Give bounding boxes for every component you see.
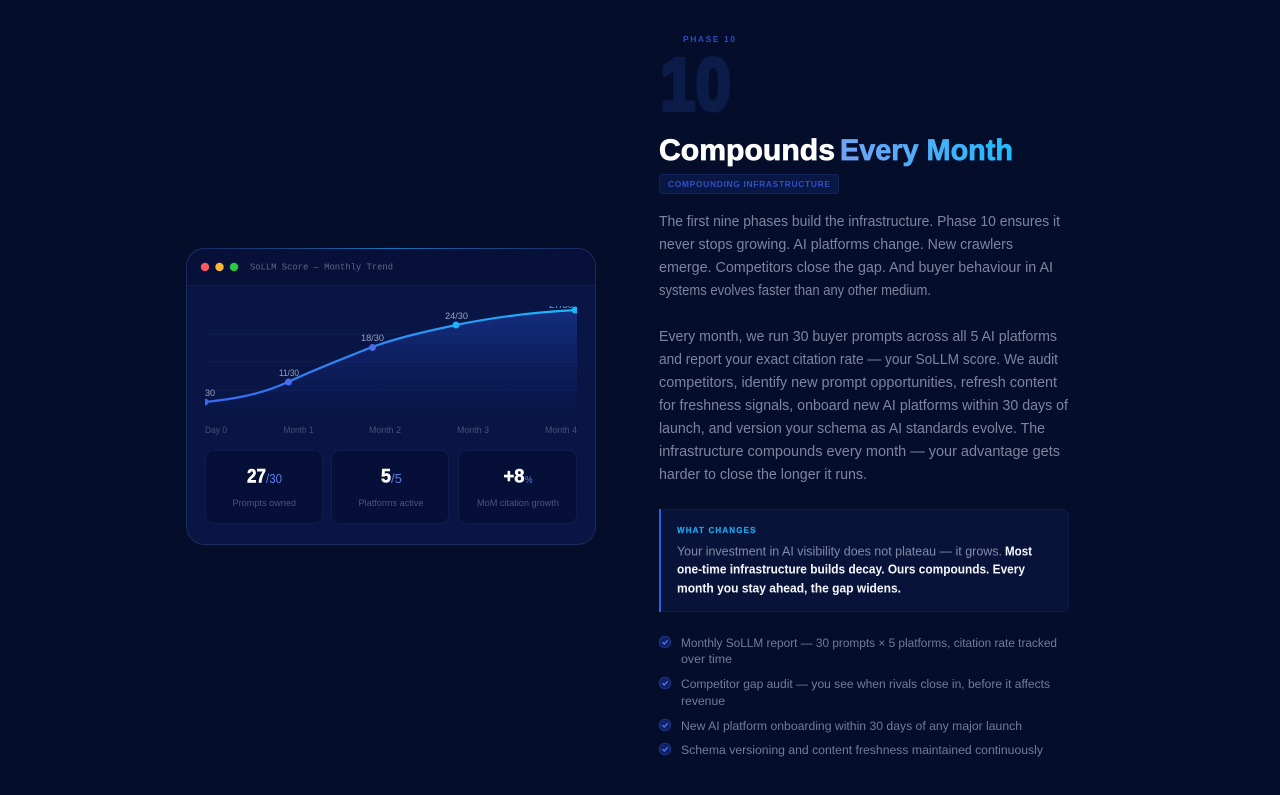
list item: platform onboarding: New AI platform onboarding within 30 days of any major launch <box>681 719 1022 733</box>
line chart: score trend: 27/30 <box>549 300 573 310</box>
chart x-axis labels: Month 4 <box>545 425 577 435</box>
line chart: score trend <box>202 300 578 435</box>
callout: what changes: one-time infrastructure builds decay. Ours compounds. Every <box>677 562 1025 576</box>
stat: month-over-month citation growth: % <box>525 475 533 486</box>
chart x-axis labels <box>205 425 577 435</box>
callout: what changes: Most <box>1005 544 1033 558</box>
text block: intro paragraph: The first nine phases build the infrastructure. Phase 10 ensures it <box>659 214 1060 230</box>
callout: what changes: Your investment in AI visibility does not plateau — it grows. <box>677 544 1002 558</box>
stat: prompts owned: Prompts owned <box>232 498 296 508</box>
list item: schema versioning: Schema versioning and content freshness maintained continuously <box>681 743 1044 757</box>
callout: what changes: WHAT CHANGES <box>677 526 756 535</box>
chart x-axis labels: Month 3 <box>457 425 489 435</box>
callout: what changes <box>659 509 1068 612</box>
text block: monthly process paragraph: for freshness signals, onboard new AI platforms within 30 days of <box>659 398 1069 414</box>
checklist <box>659 636 1057 757</box>
panel: SoLLM score dashboard card <box>186 248 596 544</box>
stat: month-over-month citation growth: +8 <box>504 466 524 488</box>
list item: monthly report: over time <box>681 652 732 666</box>
title: Every Month <box>840 134 1013 167</box>
text block: intro paragraph <box>659 214 1060 299</box>
text block: intro paragraph: systems evolves faster than any other medium. <box>659 283 931 299</box>
tag badge: COMPOUNDING INFRASTRUCTURE <box>668 179 830 189</box>
phase eyebrow: PHASE 10 <box>683 34 735 44</box>
line chart: score trend: 11/30 <box>279 368 299 378</box>
callout: what changes: month you stay ahead, the gap widens. <box>677 582 901 596</box>
chart x-axis labels: Day 0 <box>205 425 227 435</box>
list item: competitor audit: revenue <box>681 694 725 708</box>
tag badge <box>660 174 838 194</box>
chart x-axis labels: Month 1 <box>284 425 314 435</box>
stat: platforms active: /5 <box>391 472 402 486</box>
stat: prompts owned: /30 <box>266 472 282 486</box>
stat: platforms active: 5 <box>381 466 391 488</box>
line chart: score trend: 24/30 <box>445 311 468 321</box>
list item: monthly report: Monthly SoLLM report — 30 prompts × 5 platforms, citation rate tracked <box>681 636 1057 650</box>
chart x-axis labels: Month 2 <box>369 425 401 435</box>
stat: month-over-month citation growth: MoM citation growth <box>477 498 559 508</box>
stat: prompts owned: 27 <box>247 466 266 488</box>
stat: month-over-month citation growth <box>458 450 576 524</box>
title <box>659 134 1013 167</box>
card title bar: SoLLM Score — Monthly Trend <box>250 262 393 272</box>
list item: competitor audit: Competitor gap audit — you see when rivals close in, before it affects <box>681 677 1050 691</box>
card title bar <box>187 249 595 286</box>
large phase number: 10 <box>660 43 731 126</box>
stat: prompts owned <box>206 450 322 524</box>
stat: platforms active <box>332 450 448 524</box>
text block: monthly process paragraph: and report your exact citation rate — your SoLLM score. We audit <box>659 352 1058 368</box>
line chart: score trend: 30 <box>205 388 215 398</box>
text block: monthly process paragraph: harder to close the longer it runs. <box>659 467 867 483</box>
text block: monthly process paragraph: launch, and version your schema as AI standards evolve. The <box>659 421 1045 437</box>
list item: monthly report <box>659 636 1057 666</box>
text block: intro paragraph: emerge. Competitors close the gap. And buyer behaviour in AI <box>659 260 1053 276</box>
text block: intro paragraph: never stops growing. AI platforms change. New crawlers <box>659 237 1013 253</box>
text block: monthly process paragraph: infrastructure compounds every month — your advantage gets <box>659 444 1060 460</box>
stat: platforms active: Platforms active <box>358 498 424 508</box>
title: Compounds <box>659 134 835 167</box>
line chart: score trend: 18/30 <box>361 333 384 343</box>
list item: competitor audit <box>659 677 1050 708</box>
text block: monthly process paragraph <box>659 329 1069 483</box>
text block: monthly process paragraph: Every month, we run 30 buyer prompts across all 5 AI platforms <box>659 329 1057 345</box>
text block: monthly process paragraph: competitors, identify new prompt opportunities, refresh content <box>659 375 1057 391</box>
